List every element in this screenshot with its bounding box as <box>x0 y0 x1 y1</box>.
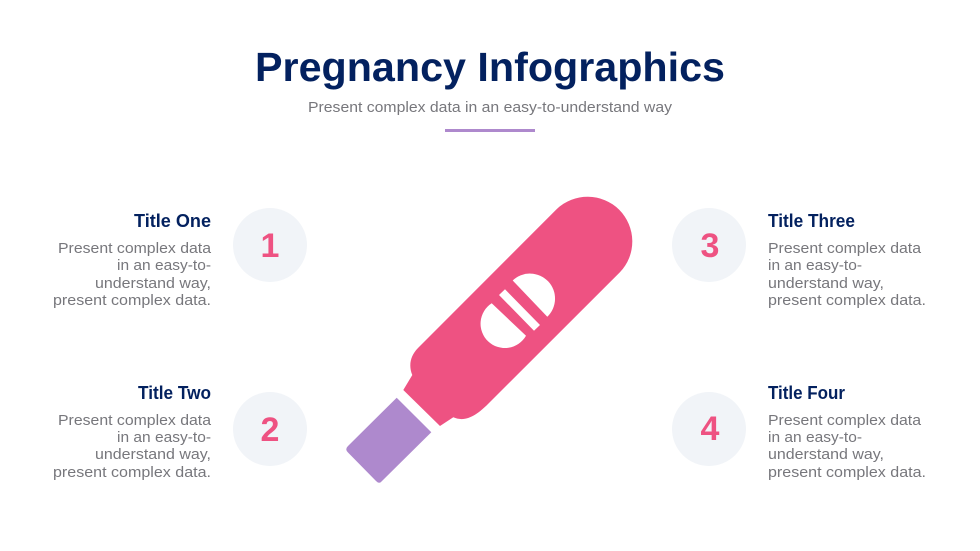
item 3 text: in an easy-to- <box>768 257 862 274</box>
item 3 text: Title Three <box>768 211 855 231</box>
item 2 text: in an easy-to- <box>117 429 211 446</box>
item 4 text <box>768 383 926 481</box>
number badge 3: 3 <box>701 227 719 265</box>
number badge 1 <box>233 208 307 282</box>
result window upper <box>513 274 555 317</box>
absorbent tip <box>346 398 431 483</box>
item 3 text: understand way, <box>768 275 884 292</box>
item 1 text: understand way, <box>95 275 211 292</box>
item 4 text: in an easy-to- <box>768 429 862 446</box>
number badge 2 <box>233 392 307 466</box>
test body <box>403 197 632 426</box>
number badge 2: 2 <box>261 411 279 449</box>
number badge 3 <box>672 208 746 282</box>
item 1 text: present complex data. <box>53 292 211 309</box>
item 2 text <box>53 383 212 481</box>
item 2 text: present complex data. <box>53 464 211 481</box>
item 2 text: understand way, <box>95 446 211 463</box>
number badge 1: 1 <box>261 227 279 265</box>
item 4 text: Present complex data <box>768 412 922 429</box>
item 1 text: in an easy-to- <box>117 257 211 274</box>
title: Pregnancy Infographics <box>255 44 725 90</box>
item 4 text: Title Four <box>768 383 845 403</box>
item 1 text <box>53 211 212 309</box>
result window lower <box>481 303 526 348</box>
item 3 text: present complex data. <box>768 292 926 309</box>
item 4 text: understand way, <box>768 446 884 463</box>
item 1 text: Present complex data <box>58 240 212 257</box>
result stripe <box>499 289 540 331</box>
item 3 text: Present complex data <box>768 240 922 257</box>
icon: pregnancy test <box>346 197 632 483</box>
item 2 text: Present complex data <box>58 412 212 429</box>
number badge 4 <box>672 392 746 466</box>
accent underline <box>445 129 535 132</box>
number badge 4: 4 <box>701 410 720 448</box>
subtitle: Present complex data in an easy-to-understand way <box>308 99 673 116</box>
item 1 text: Title One <box>134 211 211 231</box>
item 3 text <box>768 211 926 309</box>
item 4 text: present complex data. <box>768 464 926 481</box>
item 2 text: Title Two <box>138 383 211 403</box>
